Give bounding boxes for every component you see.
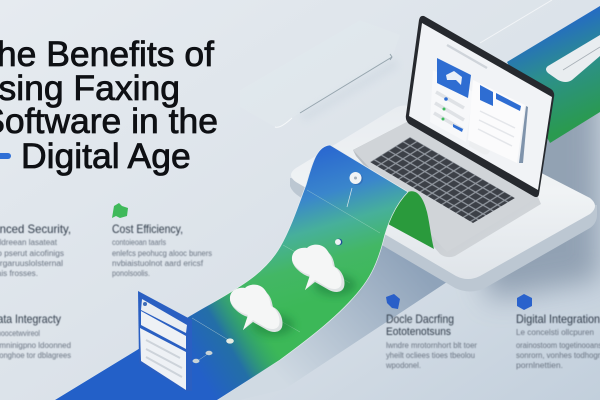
block: enhanced security <box>0 222 71 278</box>
ribbon fold lines <box>230 190 380 332</box>
top right white panel <box>546 35 600 82</box>
ribbon lower blue blend <box>55 270 320 400</box>
back ribbon, top right <box>507 6 600 143</box>
icon: blue cube <box>386 294 400 309</box>
screen bezel <box>406 16 554 197</box>
cloud icon lower <box>230 285 294 336</box>
block: cost efficiency: Cost Efficiency, <box>112 222 183 236</box>
keyboard <box>370 137 515 223</box>
cloud icon upper <box>292 245 356 296</box>
title: Digital Age <box>21 136 191 176</box>
laptop <box>353 16 554 257</box>
block: document drafting: lwndre mrotornhort blt toer <box>386 341 477 350</box>
icon: blue hexagon <box>517 294 532 310</box>
block: cost efficiency: ponolsoolis. <box>112 269 150 278</box>
ribbon <box>55 145 408 400</box>
block: cost efficiency: contoieoan taarls <box>112 238 166 247</box>
block: document drafting: yheilt ocliees tioes tbeolou <box>386 351 475 360</box>
background shadow area <box>450 70 600 300</box>
block: digital integration: pornlnettien. <box>516 361 563 370</box>
block: digital integration: Le concelsti ollcpuren <box>516 328 594 337</box>
block: cost efficiency: enlefcs peohucg alooc buners <box>112 249 212 258</box>
ribbon back side <box>388 191 434 249</box>
block: digital integration <box>516 312 600 370</box>
glass panel with arrow line <box>240 0 552 127</box>
title accent dash <box>0 153 11 159</box>
slab platform <box>290 106 597 292</box>
pin icon <box>347 172 363 207</box>
document card <box>138 291 192 391</box>
laptop base upper <box>353 122 538 252</box>
block: cost efficiency <box>112 222 212 278</box>
block: document drafting: wpodonel. <box>385 361 421 370</box>
block: cost efficiency: nvbiaistuolnot aard ericsf <box>112 259 204 268</box>
block: document drafting: Eototenotsuns <box>386 326 451 338</box>
screen contents <box>430 45 528 163</box>
shadow beside the ribbon <box>217 240 450 400</box>
block: document drafting <box>385 312 477 370</box>
icon: green <box>112 203 128 218</box>
screen <box>409 23 552 190</box>
connector dots <box>192 318 234 363</box>
laptop base <box>353 122 541 257</box>
block: document drafting: Docle Dacrfing <box>386 312 454 326</box>
title <box>0 34 218 176</box>
block: data integrity <box>0 312 71 360</box>
ribbon dot <box>335 239 342 245</box>
